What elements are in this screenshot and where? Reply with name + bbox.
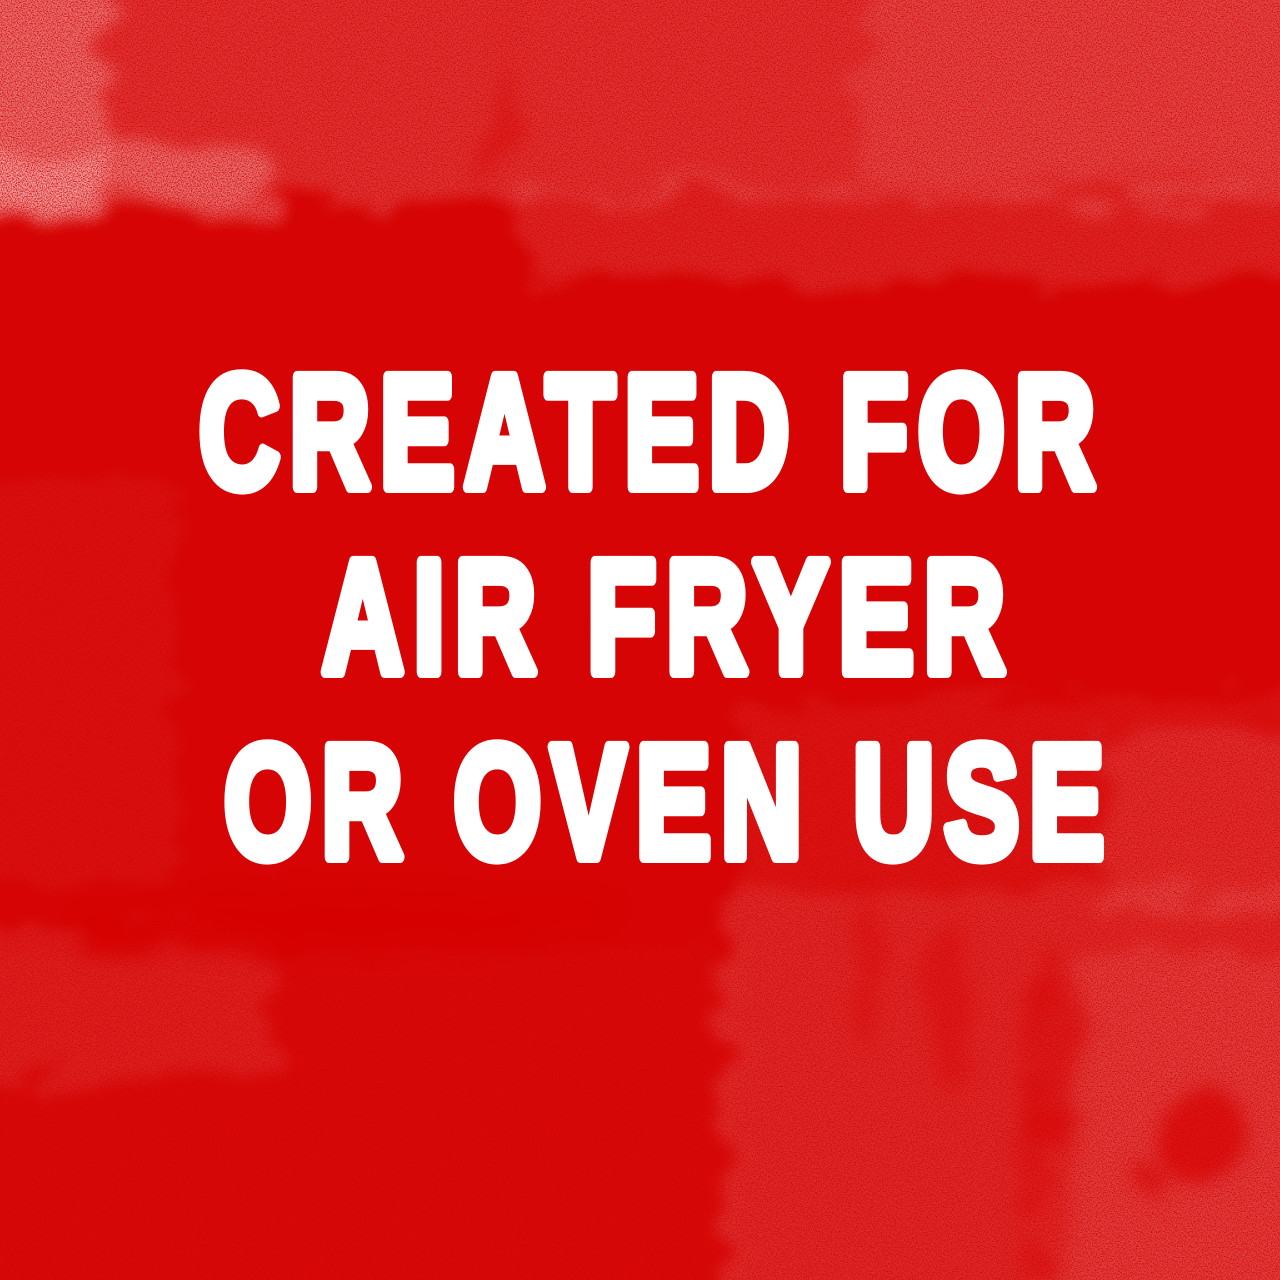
headline line 2: AIR FRYER xyxy=(322,527,1015,706)
headline xyxy=(199,342,1114,891)
